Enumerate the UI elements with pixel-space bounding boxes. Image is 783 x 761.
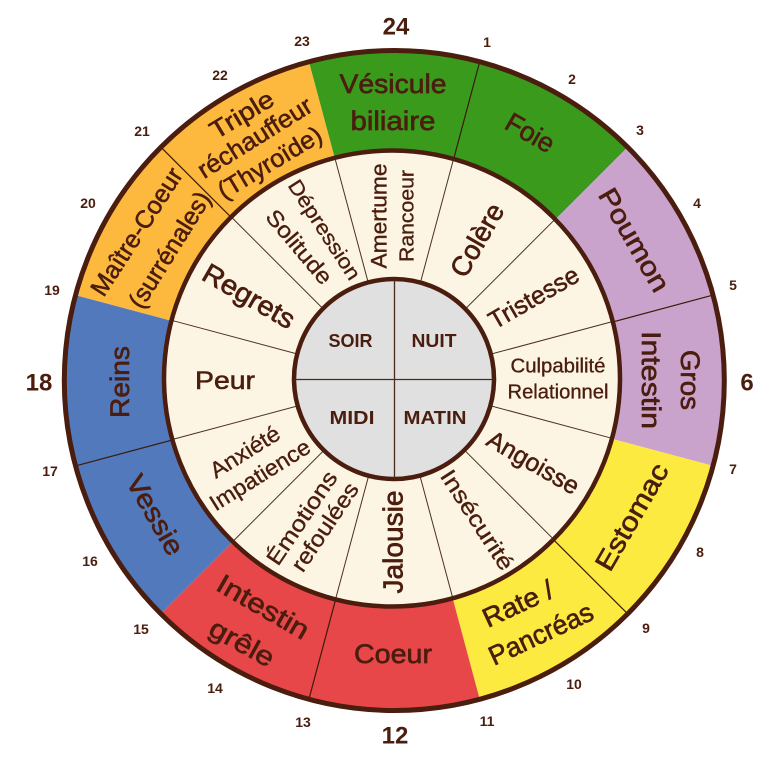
label: MIDI: MIDI: [330, 408, 374, 428]
hour numbers: 16: [82, 553, 98, 569]
emotion: Émotions refoulées: refoulées: [286, 478, 364, 576]
sector: Triple réchauffeur (Thyroïde): [161, 62, 394, 380]
label: MATIN: MATIN: [404, 408, 466, 428]
emotion: Tristesse: Tristesse: [484, 261, 584, 335]
emotion: Dépression Solitude: Dépression: [283, 176, 365, 284]
emotion: Colère: Colère: [444, 198, 510, 282]
emotion: Regrets: Regrets: [197, 257, 301, 335]
emotion: Insécurité: Insécurité: [435, 465, 519, 575]
hour numbers: 15: [133, 621, 149, 637]
emotion: Angoisse: Angoisse: [482, 425, 584, 501]
emotion: Amertume Rancoeur: [366, 164, 418, 268]
sector: Intestin grêle: [161, 380, 394, 699]
emotion: Amertume Rancoeur: Rancoeur: [396, 170, 418, 262]
sector: Coeur: [309, 380, 480, 711]
emotion: Culpabilité Relationnel: [508, 354, 608, 404]
sector: Triple réchauffeur (Thyroïde): Triple: [205, 85, 279, 145]
hour numbers: 21: [134, 123, 150, 139]
emotion: Émotions refoulées: [261, 466, 364, 576]
hour numbers: 10: [566, 676, 582, 692]
center circle: times of day: [294, 279, 494, 479]
sector: Foie: [394, 62, 628, 380]
emotion: Dépression Solitude: Solitude: [260, 204, 338, 290]
sector: Maître-Coeur (surrénales): (surrénales): [123, 187, 217, 313]
label: SOIR: SOIR: [328, 331, 372, 351]
hour numbers: 5: [729, 277, 737, 293]
hour numbers: 13: [295, 714, 311, 730]
sector: Maître-Coeur (surrénales): [76, 147, 394, 380]
sector: Vésicule biliaire: [309, 50, 480, 380]
organ clock wheel: [64, 50, 724, 711]
hour numbers: 17: [42, 463, 58, 479]
sector: Coeur: Coeur: [354, 639, 432, 669]
hour numbers: 20: [80, 195, 96, 211]
sector: Estomac: Estomac: [589, 458, 675, 576]
sector: Rate / Pancréas: Rate /: [478, 574, 559, 633]
sector: Estomac: [394, 380, 713, 614]
emotion: Culpabilité Relationnel: Relationnel: [508, 380, 608, 404]
hour numbers: 1: [483, 34, 491, 50]
sector: Reins: [64, 295, 394, 466]
sector: Foie: Foie: [500, 107, 560, 159]
sector: Gros Intestin: Gros: [675, 350, 705, 410]
sector: Vessie: [76, 380, 394, 614]
hour numbers: 7: [729, 461, 737, 477]
sector: Gros Intestin: [394, 295, 724, 466]
sector: Intestin grêle: grêle: [204, 613, 280, 673]
hour numbers: 8: [696, 544, 704, 560]
emotion: Jalousie: Jalousie: [378, 490, 408, 594]
hour numbers: 14: [207, 680, 223, 696]
hour numbers: 6: [740, 370, 754, 396]
hour numbers: 12: [382, 722, 408, 750]
hour numbers: 11: [480, 713, 495, 729]
hour numbers: 9: [642, 620, 650, 636]
hour numbers: 3: [636, 122, 644, 138]
hour numbers: 22: [212, 67, 228, 83]
hour numbers: 24: [383, 14, 410, 40]
emotion: Émotions refoulées: Émotions: [261, 466, 343, 570]
sector: Maître-Coeur (surrénales): Maître-Coeur: [85, 163, 189, 301]
sector: Intestin grêle: Intestin: [211, 569, 315, 645]
emotion: Anxiété Impatience: Anxiété: [205, 421, 285, 483]
sector: Poumon: [394, 147, 713, 380]
sector: Reins: Reins: [105, 346, 135, 418]
hour numbers: 2: [568, 71, 576, 87]
emotion: Peur: Peur: [195, 367, 255, 395]
sector: Vessie: Vessie: [120, 469, 190, 561]
sector: Poumon: Poumon: [592, 183, 676, 297]
emotion: Dépression Solitude: [260, 176, 365, 290]
sector: Rate / Pancréas: Pancréas: [484, 597, 598, 671]
sector: Triple réchauffeur (Thyroïde): (Thyroïde): [213, 121, 327, 205]
emotion: Amertume Rancoeur: Amertume: [366, 164, 392, 268]
emotion: Culpabilité Relationnel: Culpabilité: [510, 354, 606, 378]
hour numbers: 23: [294, 33, 310, 49]
sector: Triple réchauffeur (Thyroïde): réchauffeur: [192, 92, 318, 184]
hour numbers: 19: [44, 282, 60, 298]
sector: Rate / Pancréas: [394, 380, 628, 699]
label: NUIT: NUIT: [412, 331, 456, 351]
sector: Vésicule biliaire: Vésicule: [340, 69, 446, 99]
emotion: Anxiété Impatience: Impatience: [205, 434, 315, 516]
hour numbers: 4: [693, 195, 701, 211]
emotions ring: [164, 150, 620, 606]
sector: Gros Intestin: Intestin: [636, 331, 666, 429]
hour numbers: 18: [26, 370, 52, 396]
sector: Vésicule biliaire: biliaire: [350, 106, 436, 136]
